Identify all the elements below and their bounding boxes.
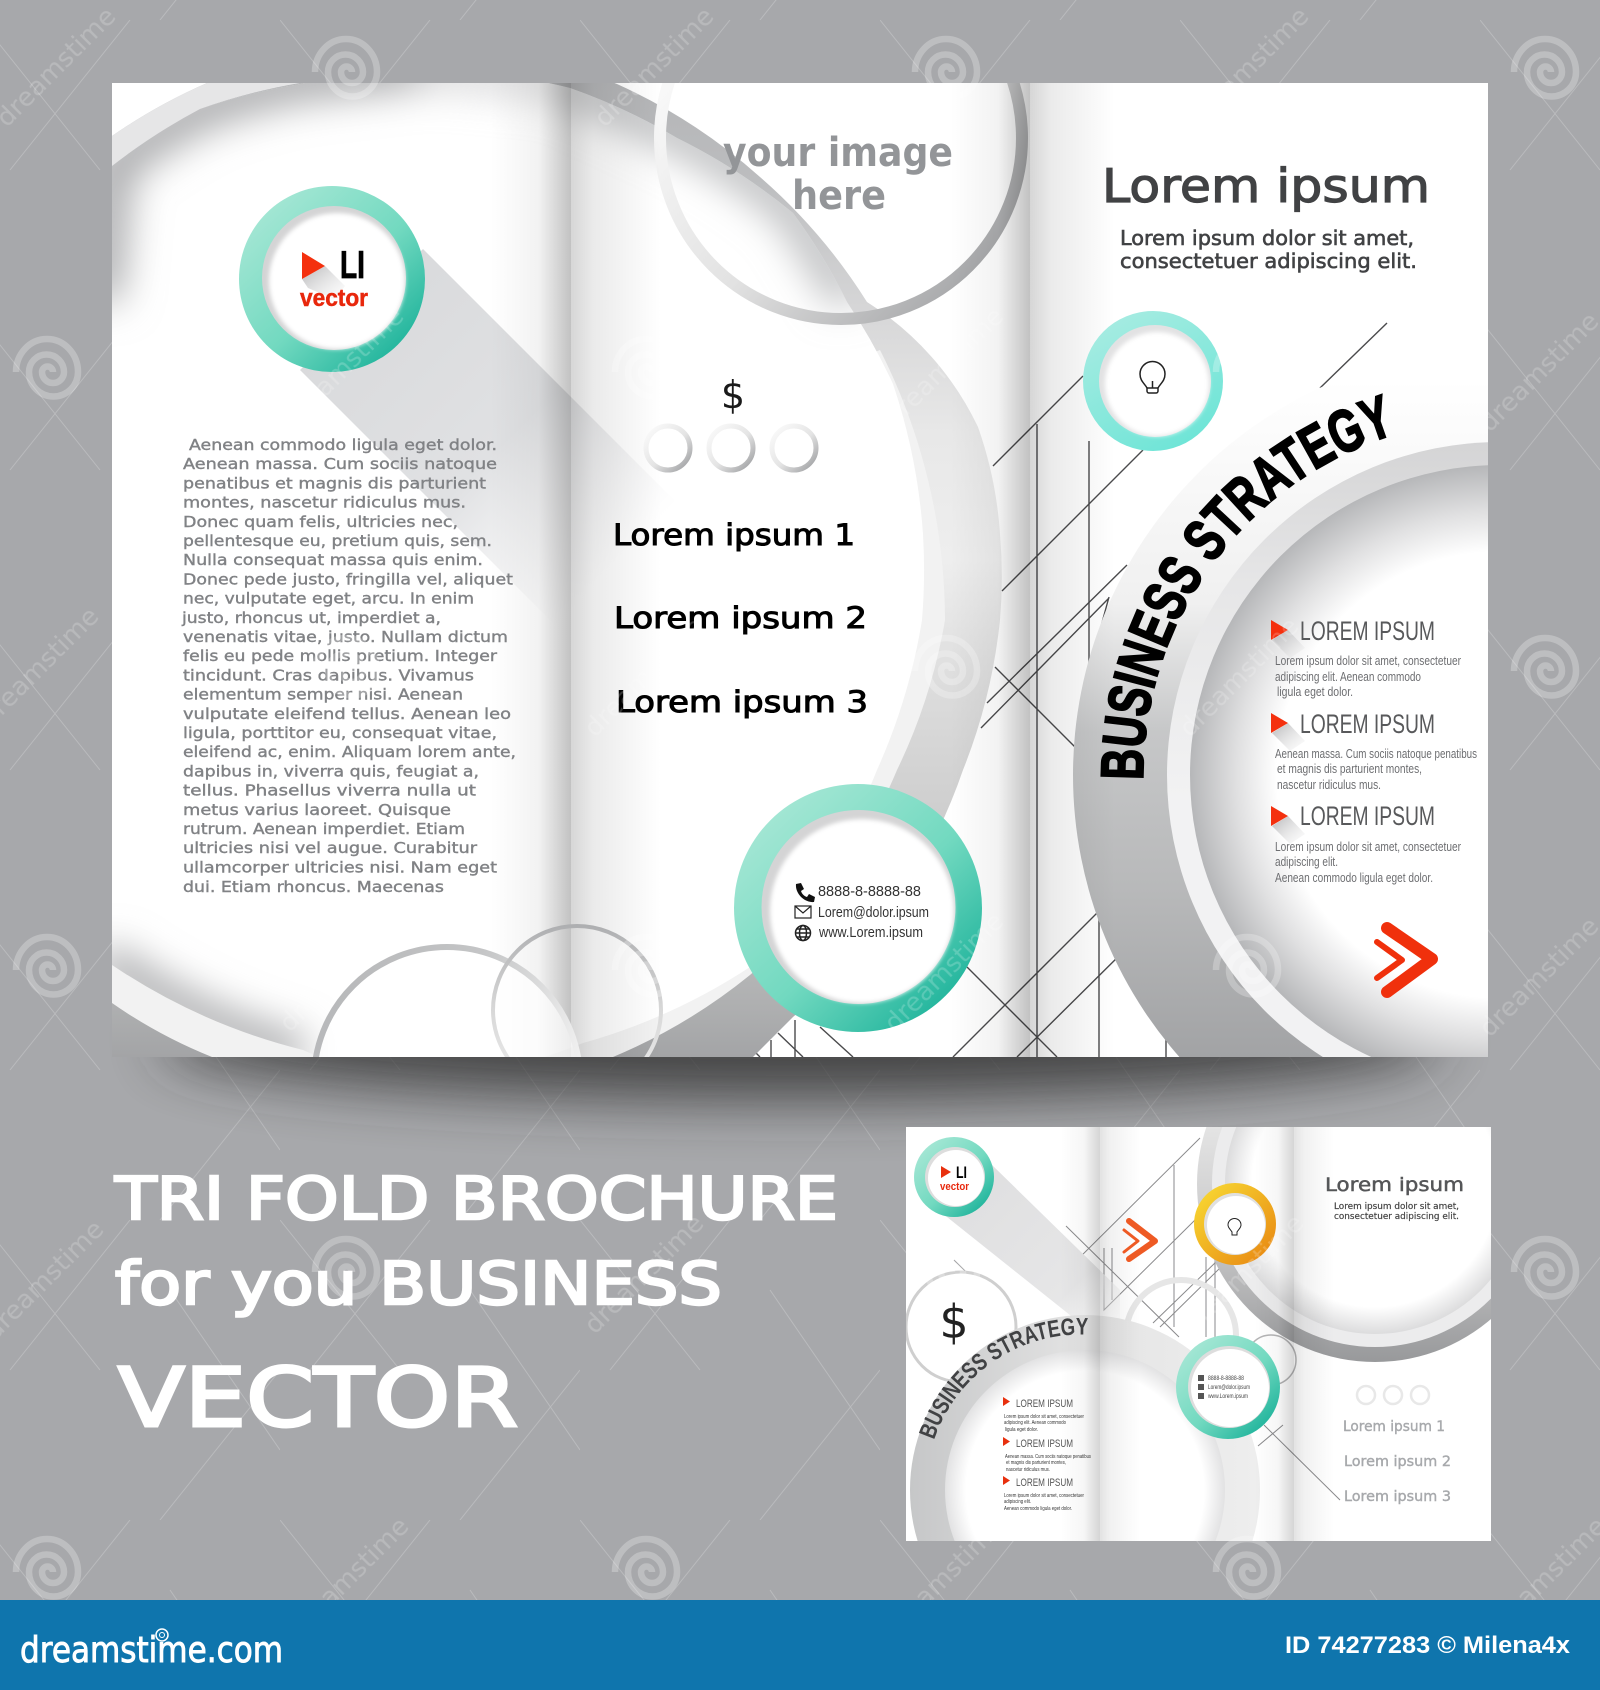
your image here placeholder (723, 130, 953, 219)
bottom ring 2 (491, 924, 663, 1057)
mini contact badge (1176, 1335, 1280, 1439)
panel 3 heading: Lorem ipsum (1102, 159, 1430, 213)
panel 1 body text: Aenean massa. Cum sociis natoque (183, 455, 497, 473)
your image here placeholder: here (792, 173, 886, 219)
headline tri fold brochure: VECTOR (118, 1352, 518, 1446)
mini list with red markers: LOREM IPSUM (1016, 1477, 1073, 1489)
panel 1 body text: justo, rhoncus ut, imperdiet a, (181, 609, 441, 627)
panel 3 item 2: Aenean massa. Cum sociis natoque penatibus (1275, 747, 1477, 761)
panel 3 item 2: LOREM IPSUM (1300, 709, 1435, 739)
contact text: www.Lorem.ipsum (818, 924, 923, 941)
panel 3 item 3: LOREM IPSUM (1300, 801, 1435, 831)
mini list with red markers: Aenean commodo ligula eget dolor. (1004, 1506, 1072, 1512)
panel 1 body text: dapibus in, viverra quis, feugiat a, (183, 762, 479, 780)
mini logo shadow (946, 1165, 1120, 1316)
watermark text: dreamstime (589, 2, 720, 133)
mini fold shading (1083, 1127, 1316, 1541)
panel 3 item 3: Aenean commodo ligula eget dolor. (1275, 871, 1433, 885)
headline tri fold brochure (114, 1164, 838, 1446)
red double arrow (1377, 928, 1432, 992)
list of lorem items: Lorem ipsum 3 (616, 685, 868, 719)
panel 3 item 3 (1271, 801, 1461, 885)
footer brand: dreamstime.com (20, 1630, 283, 1671)
icon: light bulb (1140, 362, 1165, 393)
mini list with red markers (1003, 1397, 1091, 1512)
mini dollar ring (906, 1272, 1016, 1382)
panel 1 body text (181, 436, 516, 896)
mini list with red markers: Lorem ipsum dolor sit amet, consectetuer (1004, 1493, 1084, 1499)
panel 3 item 1: adipiscing elit. Aenean commodo (1275, 670, 1421, 684)
mini center ring (1125, 1277, 1239, 1336)
brochure drop shadow (160, 980, 1440, 1100)
mini logo badge: LI (956, 1163, 967, 1182)
panel 3 item 2 (1271, 709, 1477, 792)
panel 3 item 1 (1271, 616, 1461, 699)
footer credit: ID 74277283 © Milena4x (1285, 1632, 1571, 1659)
mini list: Lorem ipsum 3 (1344, 1489, 1451, 1505)
contact badge (734, 784, 982, 1032)
panel 3 item 1: Lorem ipsum dolor sit amet, consectetuer (1275, 654, 1461, 668)
curved title business strategy: BUSINESS STRATEGY (1100, 393, 1386, 778)
mini gold badge (1194, 1183, 1276, 1265)
panel 1 body text: eleifend ac, enim. Aliquam lorem ante, (183, 743, 516, 761)
mini subheading (1334, 1202, 1459, 1222)
panel 3 item 3: Lorem ipsum dolor sit amet, consectetuer (1275, 840, 1461, 854)
watermark text: dreamstime (274, 907, 405, 1038)
panel 3 item 1: ligula eget dolor. (1277, 685, 1353, 699)
mini list with red markers: nascetur ridiculus mus. (1006, 1467, 1050, 1473)
bulb badge (1083, 311, 1223, 451)
watermark text: dreamstime (1179, 1209, 1310, 1340)
panel 1 body text: ullamcorper ultricies nisi. Nam eget (183, 858, 497, 876)
panel 2 sweeping grey band (90, 45, 1002, 1100)
mini list: Lorem ipsum 2 (1344, 1454, 1451, 1470)
mini dollar icon: $ (939, 1295, 969, 1349)
construction lines (755, 323, 1387, 1057)
watermark text: dreamstime (879, 302, 1010, 433)
mini curved title: BUSINESS STRATEGY (919, 1318, 1088, 1439)
mini contact badge: www.Lorem.ipsum (1207, 1394, 1248, 1400)
panel 3 item 3: adipiscing elit. (1275, 855, 1338, 869)
fold shading (490, 83, 1115, 1057)
panel 1 body text: nec, vulputate eget, arcu. In enim (183, 590, 474, 608)
watermark text: dreamstime (1184, 2, 1315, 133)
inner white area (90, 70, 924, 1085)
footer bar (0, 1600, 1600, 1690)
panel 1 body text: elementum semper nisi. Aenean (183, 686, 463, 704)
contact text: Lorem@dolor.ipsum (818, 904, 929, 921)
panel 1 body text: vulputate eleifend tellus. Aenean leo (183, 705, 511, 723)
mini subheading: Lorem ipsum dolor sit amet, (1334, 1202, 1459, 1212)
mini contact badge: Lorem@dolor.ipsum (1208, 1385, 1250, 1391)
mini three rings (1357, 1386, 1429, 1404)
panel 1 body text: Aenean commodo ligula eget dolor. (189, 436, 497, 454)
mini list with red markers: et magnis dis parturient montes, (1006, 1460, 1066, 1466)
mini red arrow (1124, 1221, 1155, 1259)
mini list with red markers: LOREM IPSUM (1016, 1438, 1073, 1450)
mini list with red markers: adipiscing elit. (1004, 1499, 1031, 1505)
contact text: 8888-8-8888-88 (818, 883, 921, 900)
image placeholder ring (654, 83, 1028, 325)
panel 3 item 2: et magnis dis parturient montes, (1277, 762, 1422, 776)
panel 3 item 2: nascetur ridiculus mus. (1277, 778, 1381, 792)
contact text (818, 883, 929, 941)
mini lower left circle (910, 1315, 1260, 1541)
headline tri fold brochure: TRI FOLD BROCHURE (114, 1164, 838, 1233)
mini subheading: consectetuer adipiscing elit. (1334, 1212, 1459, 1222)
watermark text: dreamstime (284, 1512, 415, 1643)
panel 3 subheading (1120, 226, 1417, 273)
mini top right circle (1197, 1127, 1491, 1362)
mini list with red markers: Lorem ipsum dolor sit amet, consectetuer (1004, 1414, 1084, 1420)
watermark text: dreamstime (879, 1512, 1010, 1643)
watermark text: dreamstime (279, 302, 410, 433)
panel 1 body text: venenatis vitae, justo. Nullam dictum (183, 628, 508, 646)
panel 1 body text: ultricies nisi vel augue. Curabitur (183, 839, 478, 857)
mini heading: Lorem ipsum (1325, 1174, 1464, 1196)
mini list (1343, 1419, 1451, 1505)
logo badge: vector (300, 285, 368, 312)
mini list: Lorem ipsum 1 (1343, 1419, 1445, 1435)
logo badge (239, 186, 425, 372)
panel 3 subheading: consectetuer adipiscing elit. (1120, 249, 1417, 273)
light inner strip (90, 350, 945, 1110)
main brochure (112, 83, 1488, 1057)
panel 1 body text: tellus. Phasellus viverra nulla ut (183, 782, 476, 800)
panel 3 subheading: Lorem ipsum dolor sit amet, (1120, 226, 1414, 250)
mini logo badge (914, 1137, 994, 1217)
panel 1 body text: Donec pede justo, fringilla vel, aliquet (183, 570, 513, 588)
watermark text: dreamstime (879, 907, 1010, 1038)
logo long shadow (300, 249, 638, 586)
panel 1 body text: Donec quam felis, ultricies nec, (183, 513, 458, 531)
panel 1 body text: pellentesque eu, pretium quis, sem. (183, 532, 492, 550)
icon: mail (795, 906, 811, 918)
mini list with red markers: LOREM IPSUM (1016, 1398, 1073, 1410)
panel 1 body text: rutrum. Aenean imperdiet. Etiam (183, 820, 465, 838)
panel 3 large circle (1073, 386, 1488, 1057)
mini logo badge: vector (940, 1181, 970, 1193)
list of lorem items: Lorem ipsum 1 (613, 518, 855, 552)
watermark text: dreamstime (579, 1209, 710, 1340)
panel 1 body text: Nulla consequat massa quis enim. (183, 551, 483, 569)
panel 1 body text: tincidunt. Cras dapibus. Vivamus (183, 666, 474, 684)
headline tri fold brochure: for you BUSINESS (115, 1249, 722, 1318)
bottom ring 1 (313, 944, 581, 1057)
your image here placeholder: your image (723, 130, 953, 176)
panel 1 body text: ligula, porttitor eu, consequat vitae, (183, 724, 497, 742)
mini list with red markers: Aenean massa. Cum sociis natoque penatibus (1005, 1454, 1091, 1460)
panel 1 body text: dui. Etiam rhoncus. Maecenas (183, 878, 444, 896)
watermark text: dreamstime (579, 612, 710, 743)
logo badge: LI (340, 244, 365, 287)
watermark text: dreamstime (1174, 612, 1305, 743)
three small rings (646, 426, 816, 470)
mini contact badge: 8888-8-8888-88 (1208, 1376, 1245, 1382)
mini small ring (1253, 1334, 1297, 1384)
list of lorem items (613, 518, 868, 719)
inner soft shading (100, 66, 850, 1054)
mini brochure preview (906, 1127, 1491, 1541)
mini list with red markers: ligula eget dolor. (1005, 1427, 1038, 1433)
icon: phone (796, 883, 815, 902)
list of lorem items: Lorem ipsum 2 (614, 601, 867, 635)
panel 1 body text: felis eu pede mollis pretium. Integer (183, 647, 498, 665)
panel 1 body text: montes, nascetur ridiculus mus. (183, 494, 466, 512)
mini lines (954, 1138, 1340, 1500)
panel 3 item 1: LOREM IPSUM (1300, 616, 1435, 646)
icon: globe (796, 926, 811, 940)
panel 1 body text: penatibus et magnis dis parturient (183, 474, 486, 492)
mini list with red markers: adipiscing elit. Aenean commodo (1004, 1420, 1066, 1426)
panel 1 body text: metus varius laoreet. Quisque (183, 801, 451, 819)
dollar icon: $ (721, 373, 745, 417)
light top-left strip (112, 83, 300, 166)
